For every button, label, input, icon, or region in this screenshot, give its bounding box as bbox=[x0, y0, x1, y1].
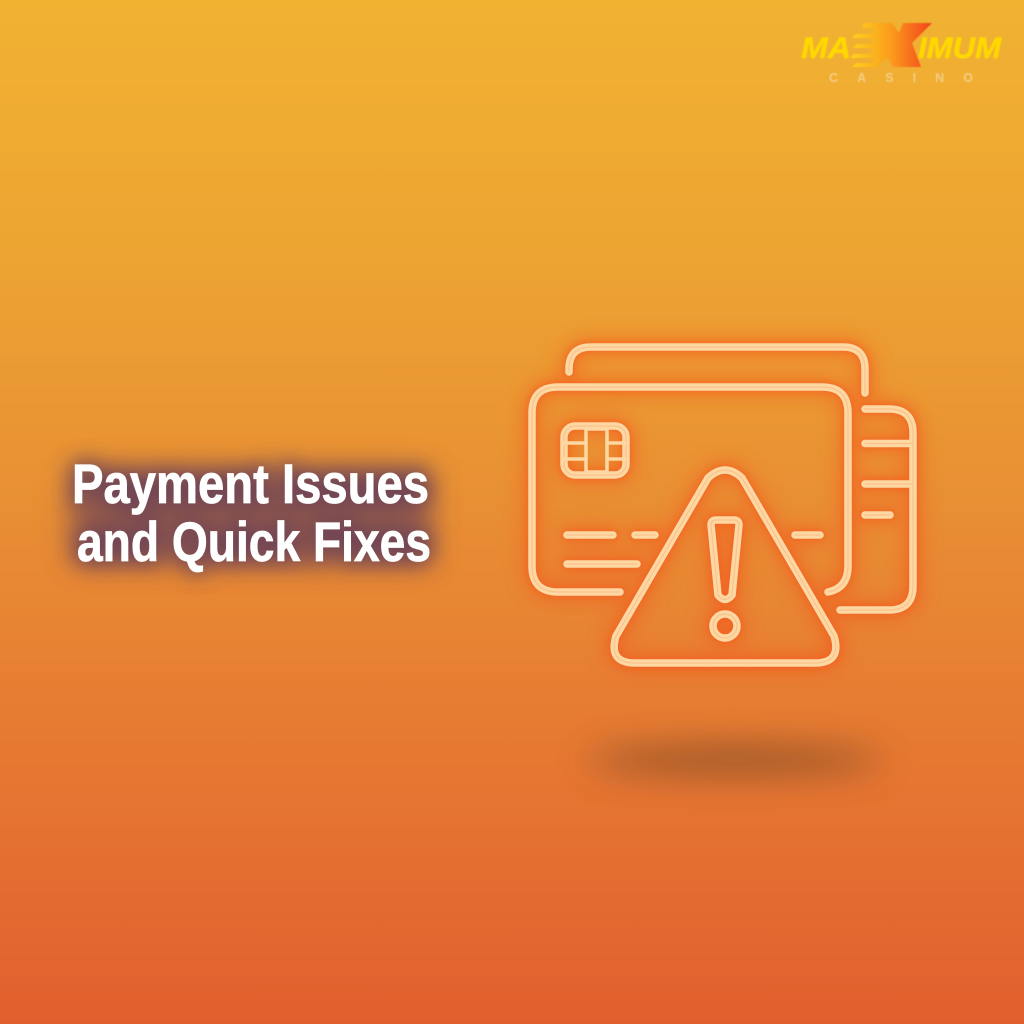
chip contacts bbox=[565, 429, 625, 472]
logo word: MA: MA bbox=[801, 32, 851, 65]
logo word: CASINO: CASINO bbox=[829, 71, 973, 85]
logo: Maximum Casino bbox=[801, 23, 1002, 85]
title block bbox=[72, 452, 445, 573]
logo word: IMUM: IMUM bbox=[918, 32, 1002, 65]
title text: Payment Issues bbox=[72, 452, 429, 515]
title shadow: Payment Issues bbox=[72, 452, 429, 515]
logo mark: speed X bbox=[850, 23, 932, 67]
icon wide glow bbox=[532, 347, 913, 663]
icon: credit cards with warning triangle bbox=[532, 347, 913, 663]
title shadow bbox=[72, 452, 431, 573]
title backdrop shadow bbox=[72, 470, 430, 562]
icon tube highlight bbox=[532, 347, 913, 663]
title text: and Quick Fixes bbox=[77, 510, 431, 573]
icon tight glow bbox=[532, 347, 913, 663]
title shadow: and Quick Fixes bbox=[77, 510, 431, 573]
floating shadow under icon bbox=[587, 746, 883, 774]
icon neon tube bbox=[532, 347, 913, 663]
